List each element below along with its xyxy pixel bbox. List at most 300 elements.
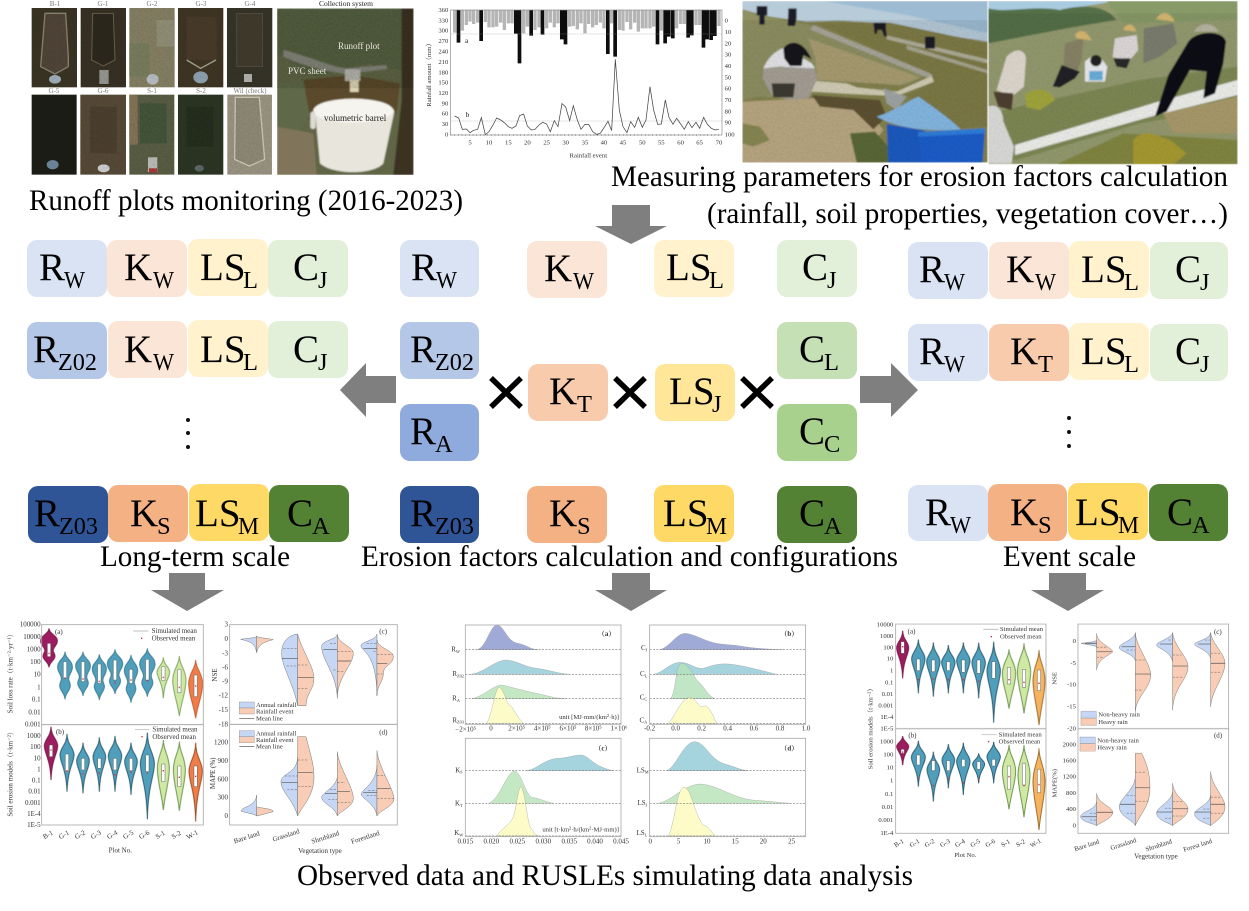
axis text long-term violins: S-1 bbox=[154, 829, 167, 841]
axis text long-term violins: Rainfall event bbox=[256, 709, 294, 716]
axis text event violins: 2000 bbox=[1063, 741, 1077, 748]
factor row 3: LS bbox=[195, 492, 241, 535]
axis text factor distributions: 15 bbox=[732, 837, 739, 845]
axis text long-term violins: Simulated mean bbox=[152, 627, 197, 635]
axis text event violins: 400 bbox=[1066, 806, 1077, 813]
label: volumetric barrel: volumetric barrel bbox=[324, 113, 387, 123]
axis text long-term violins: 0.001 bbox=[25, 799, 41, 807]
column C factors: C bbox=[799, 328, 825, 371]
axis text long-term violins: 1E-4 bbox=[27, 810, 41, 818]
axis text event violins: 1000 bbox=[880, 633, 894, 640]
axis text long-term violins: 0 bbox=[224, 635, 228, 643]
factor row 1: K bbox=[1006, 248, 1034, 291]
axis labels and ticks: Rainfall event bbox=[570, 153, 607, 160]
axis text factor distributions: 0 bbox=[489, 725, 493, 733]
axis text long-term violins: 0.01 bbox=[28, 788, 41, 796]
axis labels and ticks: 20 bbox=[524, 140, 531, 147]
axis text long-term violins: Observed mean bbox=[152, 634, 196, 642]
axis text event violins: 800 bbox=[1066, 790, 1077, 797]
axis text long-term violins: -12 bbox=[219, 692, 228, 700]
axis text long-term violins: 10 bbox=[34, 754, 41, 762]
axis text factor distributions: L bbox=[645, 832, 648, 837]
caption: long-term scale: Long-term scale bbox=[100, 541, 290, 573]
axis text long-term violins bbox=[7, 621, 388, 855]
axis text long-term violins: Plot No. bbox=[109, 847, 132, 855]
column LS factors: L bbox=[709, 267, 724, 294]
axis labels and ticks: 20 bbox=[725, 40, 732, 47]
column R factors: Z03 bbox=[435, 513, 474, 540]
plot photo G-3 bbox=[178, 8, 223, 87]
arrow: right to event scale bbox=[860, 363, 918, 417]
plot photo labels: G-1 bbox=[98, 0, 109, 8]
multiply sign 1 bbox=[491, 378, 521, 407]
axis text event violins: 1 bbox=[890, 667, 893, 674]
plot photo G-5 bbox=[32, 95, 77, 175]
column LS factors: LS bbox=[666, 246, 712, 289]
column R factors: R bbox=[410, 410, 436, 453]
axis text event violins: G-5 bbox=[969, 838, 982, 849]
arrow: down right bbox=[1031, 573, 1104, 611]
plot photo S-1 bbox=[129, 95, 174, 175]
axis text factor distributions: 0.6 bbox=[750, 725, 759, 733]
half violins panel c bbox=[241, 634, 393, 706]
axis labels and ticks: 180 bbox=[438, 69, 449, 76]
caption: measuring parameters: Measuring parameters for erosion factors calculation bbox=[611, 161, 1228, 193]
violin panel a bbox=[897, 631, 1045, 725]
column R factors: Z02 bbox=[435, 349, 474, 376]
factor row 3: M bbox=[1118, 512, 1139, 539]
caption: erosion factors: Erosion factors calculation and configurations bbox=[361, 541, 898, 573]
panel: long-term scale configurations bbox=[27, 239, 349, 543]
axis labels and ticks: 40 bbox=[725, 63, 732, 70]
factor row 3: Z03 bbox=[59, 513, 98, 540]
axis text factor distributions: S bbox=[460, 770, 463, 775]
axis text factor distributions: R bbox=[451, 646, 456, 654]
axis text event violins: S-2 bbox=[1015, 838, 1027, 849]
column LS factors bbox=[654, 240, 735, 542]
factor row 1: W bbox=[64, 267, 86, 294]
axis text long-term violins: 600 bbox=[217, 775, 228, 783]
axis text long-term violins: G-5 bbox=[122, 828, 135, 841]
factor row 2: L bbox=[1124, 351, 1139, 378]
axis text event violins: Soil erosion models（t·km⁻²） bbox=[866, 685, 874, 769]
plot photo B-1 bbox=[32, 8, 77, 87]
axis text event violins: G-3 bbox=[939, 838, 952, 849]
factor row 3: W bbox=[950, 512, 972, 539]
axis labels and ticks: 80 bbox=[725, 108, 732, 115]
axis text factor distributions: 0.025 bbox=[509, 837, 526, 845]
factor row 1: L bbox=[1124, 269, 1139, 296]
axis text factor distributions: J bbox=[646, 647, 648, 652]
column LS factors: J bbox=[712, 391, 722, 418]
label: Runoff plot: Runoff plot bbox=[338, 41, 380, 51]
plot photo Wil bbox=[227, 95, 272, 175]
axis text long-term violins: Vegetation type bbox=[298, 847, 342, 855]
axis labels and ticks: 150 bbox=[438, 80, 449, 87]
factor row 2: W bbox=[153, 349, 175, 376]
column C factors: C bbox=[799, 492, 825, 535]
factor row 1 bbox=[27, 239, 348, 297]
plot photo labels: Wil (check) bbox=[234, 87, 267, 95]
arrow: down from measurements bbox=[595, 205, 667, 244]
axis labels and ticks: 45 bbox=[620, 140, 627, 147]
axis text event violins: 0.001 bbox=[878, 817, 893, 824]
factor row 1: J bbox=[1200, 269, 1210, 296]
chart: rainfall events bbox=[425, 7, 735, 160]
axis text factor distributions: unit [t·km²·h/(km²·MJ·mm)] bbox=[542, 827, 619, 834]
factor row 1: C bbox=[1175, 248, 1201, 291]
axis text long-term violins: -15 bbox=[219, 706, 228, 714]
axis text long-term violins: S-2 bbox=[170, 829, 183, 841]
axis text factor distributions: M bbox=[645, 770, 649, 775]
factor row 2 bbox=[27, 320, 348, 379]
axis text factor distributions: C bbox=[640, 693, 644, 701]
plot photo S-2 bbox=[178, 95, 223, 175]
axis text event violins: (b) bbox=[908, 732, 917, 740]
column K factors: W bbox=[573, 268, 595, 295]
axis text long-term violins: G-6 bbox=[138, 828, 151, 841]
plot photo labels: G-4 bbox=[245, 0, 256, 8]
axis text factor distributions: K bbox=[455, 800, 460, 808]
multiply sign 3 bbox=[742, 378, 772, 407]
axis text long-term violins: -3 bbox=[222, 649, 228, 657]
factor row 3: A bbox=[312, 513, 330, 540]
axis text factor distributions: 0.8 bbox=[776, 725, 785, 733]
plot photo labels: G-3 bbox=[196, 0, 207, 8]
axis text long-term violins: W-1 bbox=[185, 828, 200, 841]
axis text long-term violins: 1000 bbox=[27, 645, 41, 653]
axis text event violins: -20 bbox=[1067, 725, 1077, 732]
column LS factors: LS bbox=[663, 492, 709, 535]
caption: observed data analysis: Observed data and RUSLEs simulating data analysis bbox=[297, 860, 913, 892]
axis text factor distributions: 4×10⁵ bbox=[534, 725, 551, 733]
axis text factor distributions: 0.2 bbox=[697, 725, 707, 733]
axis text long-term violins: 0.001 bbox=[25, 721, 41, 729]
column R factors bbox=[400, 240, 479, 543]
axis labels and ticks: 90 bbox=[442, 100, 449, 107]
axis text event violins: 100 bbox=[883, 752, 894, 759]
axis text factor distributions: C bbox=[641, 644, 646, 652]
axis text factor distributions: R bbox=[452, 695, 457, 703]
axis text long-term violins: B-1 bbox=[41, 829, 55, 841]
factor row 1: LS bbox=[1081, 248, 1127, 291]
axis text long-term violins: G-3 bbox=[89, 828, 103, 841]
factor row 2: R bbox=[33, 328, 59, 371]
plot photo labels: G-5 bbox=[49, 87, 60, 95]
axis text long-term violins: 100 bbox=[30, 743, 41, 751]
axis text factor distributions: 1×10⁶ bbox=[611, 725, 628, 733]
axis text factor distributions: 0.015 bbox=[457, 837, 474, 845]
column K factors: K bbox=[544, 247, 572, 290]
axis text event violins: NSE bbox=[1052, 672, 1059, 685]
axis text factor distributions: R bbox=[452, 716, 457, 724]
ellipsis dots bbox=[186, 418, 190, 449]
photo: measuring on slope with blue barrels bbox=[742, 1, 988, 163]
plot photo labels: B-1 bbox=[50, 0, 61, 8]
axis text event violins: Observed mean bbox=[1000, 633, 1042, 640]
axis text factor distributions: 20 bbox=[760, 837, 767, 845]
factor row 1: W bbox=[1035, 269, 1057, 296]
chart group: event-scale violins bbox=[866, 622, 1229, 860]
axis text long-term violins: Shrubland bbox=[310, 829, 341, 846]
axis text factor distributions: -0.2 bbox=[644, 725, 656, 733]
arrow: down middle bbox=[595, 573, 667, 611]
axis text event violins: 1E-5 bbox=[880, 725, 894, 732]
axis labels and ticks: 60 bbox=[677, 140, 685, 147]
axis text factor distributions: C bbox=[639, 716, 644, 724]
axis text long-term violins: G-1 bbox=[57, 828, 71, 841]
column LS factors: M bbox=[706, 513, 727, 540]
column C factors: L bbox=[824, 349, 839, 376]
axis labels and ticks: 65 bbox=[696, 140, 704, 147]
axis text factor distributions: 10 bbox=[703, 837, 711, 845]
axis text factor distributions: 0.040 bbox=[587, 837, 603, 845]
caption: parameter list: (rainfall, soil properties, vegetation cover…) bbox=[707, 198, 1228, 230]
column K factors: T bbox=[577, 391, 592, 418]
axis labels and ticks: 60 bbox=[725, 86, 732, 93]
axis text factor distributions: J bbox=[646, 802, 648, 807]
factor row 3: C bbox=[1167, 491, 1193, 534]
column C factors: C bbox=[802, 246, 828, 289]
axis text factor distributions: Z02 bbox=[457, 673, 464, 678]
axis text long-term violins: G-2 bbox=[73, 828, 87, 841]
axis labels and ticks: 240 bbox=[438, 48, 449, 55]
axis labels and ticks: 50 bbox=[639, 140, 646, 147]
axis text long-term violins: 10 bbox=[34, 671, 41, 679]
axis labels and ticks: 30 bbox=[562, 140, 570, 147]
axis text event violins: 1600 bbox=[1063, 758, 1077, 765]
axis text event violins: Heavy rain bbox=[1098, 719, 1128, 726]
axis text long-term violins: Grassland bbox=[271, 827, 301, 844]
photos: ten runoff plots bbox=[32, 8, 272, 175]
factor row 1: LS bbox=[200, 246, 246, 289]
axis text long-term violins: Soil loss rate（t·km⁻²·yr⁻¹） bbox=[7, 630, 15, 713]
axis text factor distributions: （a） bbox=[598, 630, 615, 638]
factor row 3: S bbox=[1038, 512, 1052, 539]
axis text event violins: 0.01 bbox=[882, 804, 893, 811]
axis labels and ticks: 90 bbox=[725, 120, 732, 127]
axis labels and ticks: 35 bbox=[582, 140, 589, 147]
axis text long-term violins: 100000 bbox=[20, 621, 41, 629]
axis text long-term violins: Mean line bbox=[256, 715, 283, 722]
axis text event violins: Heavy rain bbox=[1097, 745, 1127, 752]
axis text event violins: S-1 bbox=[1000, 838, 1012, 849]
axis text long-term violins: Forestland bbox=[350, 829, 381, 846]
axis text event violins: Non-heavy rain bbox=[1097, 737, 1140, 744]
axis text event violins: 0.1 bbox=[885, 791, 893, 798]
axis text event violins: Shrubland bbox=[1145, 838, 1174, 853]
axis text factor distributions: C bbox=[640, 670, 645, 678]
ridge chart d bbox=[658, 742, 792, 836]
factor row 2: LS bbox=[200, 328, 246, 371]
axis text long-term violins: 1 bbox=[37, 766, 41, 774]
factor row 3: A bbox=[1192, 512, 1210, 539]
axis text long-term violins: 300 bbox=[217, 794, 228, 802]
ellipsis dots bbox=[1067, 416, 1071, 448]
factor row 2: L bbox=[243, 349, 258, 376]
axis text factor distributions: 0.0 bbox=[671, 725, 681, 733]
axis text event violins bbox=[866, 622, 1223, 860]
axis text factor distributions: 1.0 bbox=[802, 725, 811, 733]
factor row 1 bbox=[908, 241, 1228, 299]
plot photo labels: S-1 bbox=[147, 87, 157, 95]
factor row 2: T bbox=[1038, 351, 1053, 378]
factor row 1: R bbox=[39, 246, 65, 289]
axis text long-term violins: MAPE (%) bbox=[209, 757, 217, 789]
column R factors: W bbox=[436, 267, 458, 294]
arrow: down left bbox=[151, 573, 224, 611]
axis text event violins: G-2 bbox=[924, 838, 936, 849]
axis labels and ticks: 300 bbox=[438, 28, 449, 35]
axis text event violins: -10 bbox=[1067, 682, 1077, 689]
axis text event violins: Bare land bbox=[1074, 838, 1101, 853]
factor row 3: R bbox=[925, 491, 951, 534]
axis text event violins: Vegetation type bbox=[1134, 852, 1178, 860]
plot photo G-1 bbox=[81, 8, 126, 87]
axis text event violins: 0.01 bbox=[882, 691, 893, 698]
axis text event violins: 1E-4 bbox=[880, 714, 894, 721]
axis text event violins: W-1 bbox=[1029, 838, 1043, 850]
factor row 3: M bbox=[238, 513, 259, 540]
axis text factor distributions: Z03 bbox=[457, 720, 464, 725]
axis text long-term violins: 1000 bbox=[27, 732, 41, 740]
axis labels and ticks: 30 bbox=[442, 121, 449, 128]
axis text long-term violins: Simulated mean bbox=[152, 726, 198, 734]
factor row 2: C bbox=[1175, 330, 1201, 373]
axis text long-term violins: -18 bbox=[219, 720, 228, 728]
axis text long-term violins: 1E-5 bbox=[27, 821, 41, 829]
axis text factor distributions: T bbox=[460, 803, 463, 808]
axis text event violins: Grassland bbox=[1110, 837, 1138, 852]
axis text event violins: Plot No. bbox=[954, 852, 977, 859]
axis text long-term violins: (d) bbox=[379, 729, 388, 737]
axis text event violins: 1E-4 bbox=[880, 830, 894, 837]
axis text factor distributions: 0.035 bbox=[561, 837, 578, 845]
photo: collection system bbox=[277, 0, 414, 175]
axis labels and ticks: 10 bbox=[486, 140, 493, 147]
legends a b c d frames bbox=[133, 631, 254, 747]
column K factors: K bbox=[549, 492, 577, 535]
half violins panel d bbox=[241, 737, 394, 816]
legends bbox=[982, 629, 1096, 751]
axis text long-term violins: 3 bbox=[224, 621, 228, 629]
axis labels and ticks: a bbox=[465, 36, 469, 45]
axis labels and ticks: 30 bbox=[725, 52, 732, 59]
factor row 2: J bbox=[318, 349, 328, 376]
axis text long-term violins: -9 bbox=[222, 678, 228, 686]
factor row 2: K bbox=[1010, 330, 1038, 373]
axis labels and ticks: 330 bbox=[438, 17, 449, 24]
axis labels and ticks: 0 bbox=[725, 18, 729, 25]
axis text event violins: -15 bbox=[1067, 703, 1077, 710]
axis labels and ticks: 70 bbox=[725, 97, 732, 104]
axis text factor distributions: LS bbox=[637, 799, 646, 807]
axis text long-term violins: Soil erosion models（t·km⁻²） bbox=[7, 728, 15, 817]
chart group: long-term violins bbox=[7, 621, 397, 855]
panel: erosion factor configurations bbox=[400, 240, 857, 543]
axis text long-term violins: Annual rainfall bbox=[256, 702, 297, 709]
factor row 2: Z02 bbox=[58, 349, 97, 376]
column R factors: R bbox=[410, 492, 436, 535]
violin panel a bbox=[41, 628, 203, 718]
axis text long-term violins: 1 bbox=[37, 683, 41, 691]
axis text event violins: 10000 bbox=[877, 622, 894, 629]
axis text factor distributions: C bbox=[644, 697, 647, 702]
axis text factor distributions: 2×10⁵ bbox=[508, 725, 526, 733]
plot photo labels bbox=[49, 0, 267, 95]
axis text factor distributions: A bbox=[644, 720, 648, 725]
axis labels and ticks: 5 bbox=[468, 140, 472, 147]
axis text factor distributions: A bbox=[457, 698, 461, 703]
factor row 3: K bbox=[130, 492, 158, 535]
factor row 2 bbox=[908, 323, 1228, 381]
factor row 2: R bbox=[919, 330, 945, 373]
axis labels and ticks: 40 bbox=[601, 140, 608, 147]
person crouching bbox=[763, 65, 817, 100]
axis labels and ticks: 70 bbox=[716, 140, 723, 147]
plot photo labels: S-2 bbox=[196, 87, 206, 95]
axis labels and ticks bbox=[425, 7, 735, 160]
panel: event scale configurations bbox=[908, 241, 1228, 541]
axis text long-term violins: -6 bbox=[222, 663, 228, 671]
axis text long-term violins: 900 bbox=[217, 757, 228, 765]
axis text factor distributions: W bbox=[456, 649, 461, 654]
violin panel b bbox=[44, 727, 202, 822]
axis text long-term violins: (a) bbox=[55, 628, 63, 636]
axis text event violins: (a) bbox=[908, 627, 916, 635]
ridge chart c bbox=[488, 755, 613, 836]
chart group: factor distributions bbox=[451, 625, 811, 845]
axis text event violins: (d) bbox=[1214, 732, 1223, 740]
axis labels and ticks: Rainfall amount（mm） bbox=[425, 40, 433, 107]
axis text event violins: 1000 bbox=[880, 739, 894, 746]
axis text factor distributions: K bbox=[454, 829, 459, 837]
column C factors: J bbox=[827, 267, 837, 294]
axis labels and ticks: 120 bbox=[438, 90, 449, 97]
axis text event violins: B-1 bbox=[893, 838, 905, 849]
column R factors: A bbox=[435, 431, 453, 458]
axis text factor distributions: K bbox=[455, 766, 460, 774]
axis labels and ticks: 55 bbox=[658, 140, 665, 147]
factor row 3: LS bbox=[1075, 491, 1121, 534]
axis text event violins: -5 bbox=[1070, 660, 1077, 667]
axis labels and ticks: b bbox=[466, 110, 470, 119]
column C factors: A bbox=[824, 513, 842, 540]
axis text event violins: G-6 bbox=[984, 838, 997, 849]
violin panel b bbox=[897, 736, 1045, 830]
axis labels and ticks: 270 bbox=[438, 38, 449, 45]
axis text long-term violins: 10000 bbox=[23, 633, 41, 641]
axis text event violins: 1200 bbox=[1063, 774, 1077, 781]
axis text long-term violins: 0.1 bbox=[32, 696, 41, 704]
axis text long-term violins: NSE bbox=[211, 668, 219, 682]
axis text factor distributions: 6×10⁵ bbox=[560, 725, 577, 733]
axis text long-term violins: Mean line bbox=[256, 744, 283, 751]
axis text factor distributions: （b） bbox=[780, 630, 798, 638]
axis labels and ticks: 25 bbox=[543, 140, 551, 147]
plot photo labels: G-2 bbox=[147, 0, 158, 8]
axis labels and ticks: 60 bbox=[442, 111, 449, 118]
axis text long-term violins: (b) bbox=[56, 728, 65, 736]
axis text event violins: 0 bbox=[1073, 638, 1077, 645]
plot photo G-4 bbox=[227, 8, 272, 87]
axis text factor distributions: 0.020 bbox=[483, 837, 500, 845]
axis text long-term violins: (c) bbox=[379, 628, 388, 636]
caption: event scale: Event scale bbox=[1003, 541, 1136, 573]
factor row 2: C bbox=[293, 328, 319, 371]
column K factors: S bbox=[577, 513, 591, 540]
axis text event violins: 0.001 bbox=[878, 702, 893, 709]
